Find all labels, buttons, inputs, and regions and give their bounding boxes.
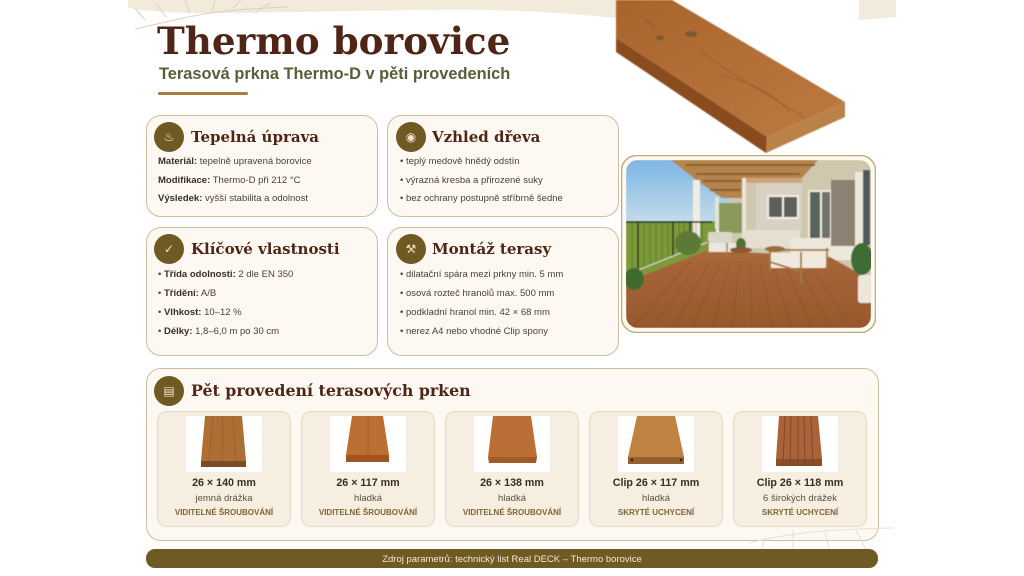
text block: terrace installation [400, 269, 563, 337]
icon: steam: ♨ [164, 130, 174, 144]
text block: key properties: • Třídění: A/B [158, 288, 216, 299]
text block: terrace installation: • dilatační spára mezi prkny min. 5 mm [400, 269, 563, 280]
title underline [158, 92, 248, 95]
board 2 surface: hladká [354, 492, 382, 504]
panel: wood appearance [387, 115, 618, 216]
icon: tools [396, 234, 426, 264]
photo: finished terrace [621, 155, 876, 333]
board 3 surface: hladká [498, 492, 526, 504]
board 3 mounting: VIDITELNÉ ŠROUBOVÁNÍ [463, 508, 561, 517]
board image 3 [474, 416, 550, 472]
board image 5 [762, 416, 838, 472]
text block: wood appearance: • bez ochrany postupně stříbrně šedne [400, 193, 563, 204]
board 1 mounting: VIDITELNÉ ŠROUBOVÁNÍ [175, 508, 273, 517]
decorative branch bottom right [750, 528, 893, 549]
text block: wood appearance [400, 156, 563, 204]
subtitle: Terasová prkna Thermo-D v pěti provedeních [159, 65, 510, 83]
icon: boards list [154, 376, 184, 406]
heading: thermal treatment: Tepelná úprava [191, 128, 319, 146]
hero image: thermo pine plank [615, 0, 846, 154]
board 2 mounting: VIDITELNÉ ŠROUBOVÁNÍ [319, 508, 417, 517]
heading: wood appearance: Vzhled dřeva [432, 128, 540, 146]
heading: terrace installation: Montáž terasy [432, 240, 551, 258]
text block: wood appearance: • teplý medově hnědý odstín [400, 156, 520, 167]
panel: thermal treatment [146, 115, 378, 216]
board 3 size: 26 × 138 mm [480, 477, 544, 489]
text block: key properties: • Délky: 1,8–6,0 m po 30 cm [158, 326, 279, 337]
icon: check mark: ✓ [164, 242, 174, 256]
text block: thermal treatment: Modifikace: Thermo-D při 212 °C [158, 174, 300, 186]
text block: terrace installation: • nerez A4 nebo vhodné Clip spony [400, 326, 548, 337]
icon: tools: ⚒ [406, 242, 416, 256]
board 4 mounting: SKRYTÉ UCHYCENÍ [618, 508, 694, 517]
board 5 surface: 6 širokých drážek [763, 492, 837, 504]
text block: thermal treatment: Výsledek: vyšší stabilita a odolnost [158, 193, 308, 204]
board image 4 [618, 416, 694, 472]
title: Thermo borovice [157, 19, 510, 63]
text block: wood appearance: • výrazná kresba a přirozené suky [400, 174, 543, 186]
heading: key properties: Klíčové vlastnosti [191, 240, 340, 258]
board 4 size: Clip 26 × 117 mm [613, 477, 699, 489]
text block: thermal treatment: Materiál: tepelně upravená borovice [158, 156, 312, 167]
text block: terrace installation: • osová rozteč hranolů max. 500 mm [400, 288, 554, 299]
text block: key properties: • Třída odolnosti: 2 dle EN 350 [158, 269, 293, 280]
icon: wood ring [396, 122, 426, 152]
board 2 size: 26 × 117 mm [336, 477, 400, 489]
card: 26 x 138 mm [445, 411, 579, 527]
icon: wood ring: ◉ [406, 130, 416, 144]
card: Clip 26 x 118 mm [733, 411, 867, 527]
board image 1 [186, 416, 262, 472]
footer source bar: Zdroj parametrů: technický list Real DECK – Thermo borovice [382, 554, 642, 565]
icon: steam [154, 122, 184, 152]
board 5 mounting: SKRYTÉ UCHYCENÍ [762, 508, 838, 517]
text block: key properties [158, 269, 293, 337]
icon: boards list: ▤ [163, 384, 175, 398]
heading: five board versions: Pět provedení terasových prken [191, 381, 471, 400]
board image 2 [330, 416, 406, 472]
text block: terrace installation: • podkladní hranol min. 42 × 68 mm [400, 307, 550, 318]
board 1 size: 26 × 140 mm [192, 477, 256, 489]
panel: five board versions [146, 368, 878, 540]
text block: key properties: • Vlhkost: 10–12 % [158, 307, 242, 318]
footer source bar [146, 549, 878, 568]
board 5 size: Clip 26 × 118 mm [757, 477, 843, 489]
board 1 surface: jemná drážka [195, 492, 253, 504]
text block: thermal treatment [158, 156, 312, 204]
card: Clip 26 x 117 mm [589, 411, 723, 527]
panel: terrace installation [387, 227, 618, 356]
panel: key properties [146, 227, 378, 356]
icon: check mark [154, 234, 184, 264]
board 4 surface: hladká [642, 492, 670, 504]
card: 26 x 117 mm [301, 411, 435, 527]
card: 26 x 140 mm [157, 411, 291, 527]
